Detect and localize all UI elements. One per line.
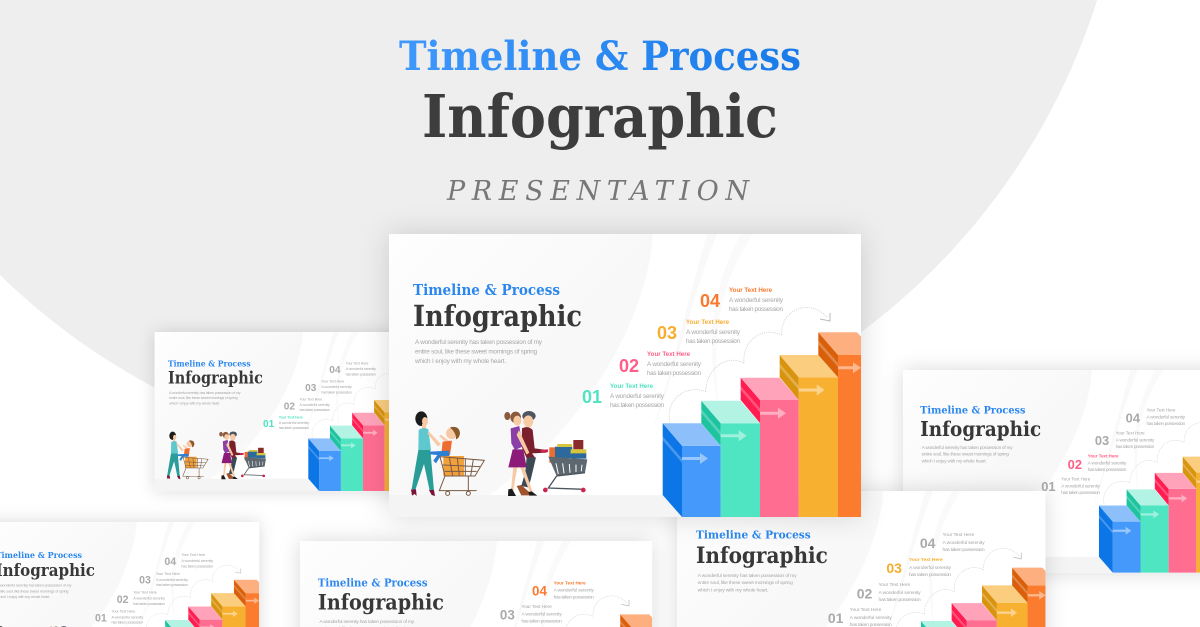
panel: lower-right slide preview: 03	[886, 560, 902, 576]
panel: bottom-left slide preview: Your Text Here	[181, 553, 205, 557]
panel: right slide preview: has taken possession	[1116, 444, 1155, 449]
panel: left slide preview: Your Text Here	[299, 398, 322, 402]
slide description: A wonderful serenity has taken possession of my	[415, 339, 543, 346]
panel: right slide preview: 04	[1126, 410, 1141, 425]
panel: bottom-middle slide preview: A wonderful serenity	[522, 612, 562, 618]
panel: right slide preview: Your Text Here	[1146, 408, 1176, 413]
panel: bottom-middle slide preview: Timeline & Process	[318, 577, 428, 590]
panel: bottom-left slide preview	[0, 522, 259, 627]
step 04: 04	[700, 291, 720, 311]
panel: left slide preview: has taken possession	[321, 390, 352, 394]
panel: right slide preview: A wonderful serenity	[1061, 483, 1101, 488]
panel: lower-right slide preview: Timeline & Process	[696, 528, 811, 542]
panel: left slide preview: A wonderful serenity has taken possession of my	[169, 391, 241, 395]
heading: Presentation: PRESENTATION	[446, 176, 750, 207]
panel: lower-right slide preview: A wonderful serenity	[909, 565, 952, 571]
step 03	[657, 319, 741, 345]
panel: lower-right slide preview: A wonderful serenity has taken possession of my	[698, 573, 797, 579]
panel: bottom-left slide preview: 03	[139, 575, 151, 587]
panel: right slide preview: 03	[1095, 433, 1109, 448]
step 01	[582, 383, 665, 409]
panel: lower-right slide preview: Your Text Here	[909, 557, 943, 563]
panel: main slide	[389, 234, 861, 517]
panel: bottom-middle slide preview: A wonderful serenity	[554, 588, 595, 594]
panel: bottom-left slide preview: A wonderful serenity	[133, 597, 165, 601]
panel: left slide preview: A wonderful serenity	[346, 367, 376, 371]
panel: left slide preview: A wonderful serenity	[299, 403, 330, 407]
panel: left slide preview: Timeline & Process	[168, 358, 251, 368]
icon: shoppers with carts	[411, 411, 587, 496]
panel: lower-right slide preview: 02	[857, 586, 872, 602]
panel: right slide preview: A wonderful serenity has taken possession of my	[922, 445, 1013, 450]
slide description: entire soul, like these sweet mornings of spring	[415, 348, 537, 356]
step 02: Your Text Here	[647, 351, 691, 358]
step 04: A wonderful serenity	[729, 297, 784, 304]
slide description: which I enjoy with my whole heart.	[414, 358, 506, 365]
panel: left slide preview: A wonderful serenity	[279, 421, 309, 425]
panel: bottom-left slide preview: has taken possession	[181, 564, 213, 568]
step 01: Your Text Here	[610, 383, 654, 390]
panel: lower-right slide preview: Infographic	[696, 543, 828, 569]
slide description	[414, 339, 543, 365]
panel: left slide preview: A wonderful serenity	[321, 385, 352, 389]
panel: bottom-middle slide preview: Your Text Here	[522, 604, 552, 609]
step 04	[700, 287, 784, 313]
panel: bottom-left slide preview: Your Text Here	[156, 572, 180, 576]
3D bar chart staircase	[663, 332, 861, 517]
panel: lower-right slide preview: A wonderful serenity	[942, 540, 985, 546]
panel: right slide preview: has taken possession	[1061, 490, 1100, 495]
step 02: A wonderful serenity	[647, 361, 702, 368]
panel: lower-right slide preview: has taken possession	[909, 572, 951, 578]
step 01: A wonderful serenity	[610, 393, 665, 400]
panel: right slide preview: A wonderful serenity	[1088, 461, 1127, 466]
panel: bottom-middle slide preview: 03	[500, 607, 515, 622]
panel: right slide preview: A wonderful serenity	[1116, 438, 1155, 443]
panel: lower-right slide preview: Your Text Here	[850, 607, 882, 613]
panel: left slide preview: 04	[329, 365, 341, 376]
panel: left slide preview: Your Text Here	[321, 380, 344, 384]
panel: bottom-left slide preview: has taken possession	[111, 621, 143, 625]
panel: right slide preview: Your Text Here	[1116, 430, 1145, 435]
panel: bottom-middle slide preview: has taken possession	[522, 618, 562, 624]
panel: bottom-left slide preview: 04	[164, 556, 176, 568]
panel: lower-right slide preview: A wonderful serenity	[850, 615, 892, 621]
panel: left slide preview: has taken possession	[299, 408, 330, 412]
step 01: 01	[582, 387, 602, 407]
panel: right slide preview: Infographic	[920, 417, 1041, 441]
panel: right slide preview: 02	[1068, 457, 1082, 472]
panel: lower-right slide preview: which I enjoy with my whole heart.	[698, 588, 769, 594]
panel: bottom-left slide preview: Your Text Here	[111, 610, 135, 614]
panel: bottom-middle slide preview: Your Text Here	[554, 580, 586, 585]
panel: left slide preview: Your Text Here	[346, 362, 368, 366]
step 03: A wonderful serenity	[686, 329, 741, 336]
panel: lower-right slide preview: 01	[828, 610, 844, 626]
panel: bottom-left slide preview: A wonderful serenity	[181, 559, 213, 563]
panel: bottom-left slide preview: has taken possession	[156, 583, 188, 587]
panel: right slide preview: Timeline & Process	[920, 405, 1026, 417]
panel: left slide preview: Infographic	[168, 369, 263, 388]
panel: left slide preview: entire soul, like these sweet mornings of spring	[169, 396, 238, 400]
panel: lower-right slide preview: entire soul, like these sweet mornings of spring	[698, 580, 793, 586]
panel: right slide preview: Your Text Here	[1088, 453, 1119, 458]
panel: lower-right slide preview: has taken possession	[879, 597, 921, 603]
slide title	[413, 282, 582, 333]
panel: lower-right slide preview: has taken possession	[942, 547, 985, 553]
step 04: Your Text Here	[729, 287, 773, 294]
panel: right slide preview: entire soul, like these sweet mornings of spring	[922, 452, 1009, 457]
panel: bottom-middle slide preview: Infographic	[318, 591, 444, 616]
step 03: has taken possession	[686, 338, 740, 345]
step 02: has taken possession	[647, 370, 701, 377]
panel: lower-right slide preview: Your Text Here	[879, 582, 911, 588]
panel: right slide preview: has taken possession	[1088, 467, 1127, 472]
panel: bottom-middle slide preview: A wonderful serenity has taken possession of my	[319, 619, 415, 625]
panel: bottom-middle slide preview: 04	[532, 583, 547, 598]
panel: bottom-left slide preview: has taken possession	[133, 602, 165, 606]
panel: bottom-middle slide preview	[300, 541, 652, 627]
panel: right slide preview: 01	[1041, 479, 1056, 494]
panel: right slide preview: A wonderful serenity	[1146, 415, 1186, 420]
step 04: has taken possession	[729, 306, 783, 313]
panel: right slide preview: which I enjoy with my whole heart.	[922, 458, 987, 463]
panel: bottom-left slide preview: A wonderful serenity	[111, 615, 143, 619]
panel: left slide preview: has taken possession	[346, 372, 376, 376]
panel: left slide preview: 03	[305, 383, 317, 394]
panel: bottom-left slide preview: 02	[117, 594, 129, 606]
dotted cloud path with arrow	[669, 308, 830, 422]
slide title: Infographic	[413, 299, 582, 333]
panel: left slide preview: which I enjoy with my whole heart.	[169, 401, 220, 405]
panel: left slide preview: 02	[284, 402, 295, 413]
panel: bottom-left slide preview: A wonderful serenity	[156, 578, 188, 582]
panel: bottom-left slide preview: Your Text Here	[133, 591, 157, 595]
step 02	[619, 351, 702, 377]
step 03: 03	[657, 323, 677, 343]
panel: left slide preview	[154, 332, 420, 491]
slide title: Timeline & Process	[413, 282, 560, 299]
panel: bottom-middle slide preview: has taken possession	[554, 594, 594, 600]
panel: left slide preview: 01	[263, 419, 275, 430]
panel: left slide preview: has taken possession	[279, 426, 309, 430]
panel: bottom-left slide preview: 01	[95, 612, 107, 624]
panel: lower-right slide preview	[677, 491, 1045, 627]
step 02: 02	[619, 356, 639, 376]
panel: right slide preview: has taken possession	[1146, 421, 1186, 426]
panel: lower-right slide preview: 04	[920, 535, 936, 551]
panel: lower-right slide preview: Your Text Here	[942, 532, 974, 538]
panel: lower-right slide preview: A wonderful serenity	[879, 590, 921, 596]
step 03: Your Text Here	[686, 319, 730, 326]
panel: left slide preview: Your Text Here	[279, 416, 303, 420]
heading: Infographic: Infographic	[422, 82, 778, 151]
panel: right slide preview	[903, 370, 1200, 573]
panel: right slide preview: Your Text Here	[1061, 476, 1091, 481]
step 01: has taken possession	[610, 402, 664, 409]
heading: Timeline & Process: Timeline & Process	[399, 33, 801, 80]
